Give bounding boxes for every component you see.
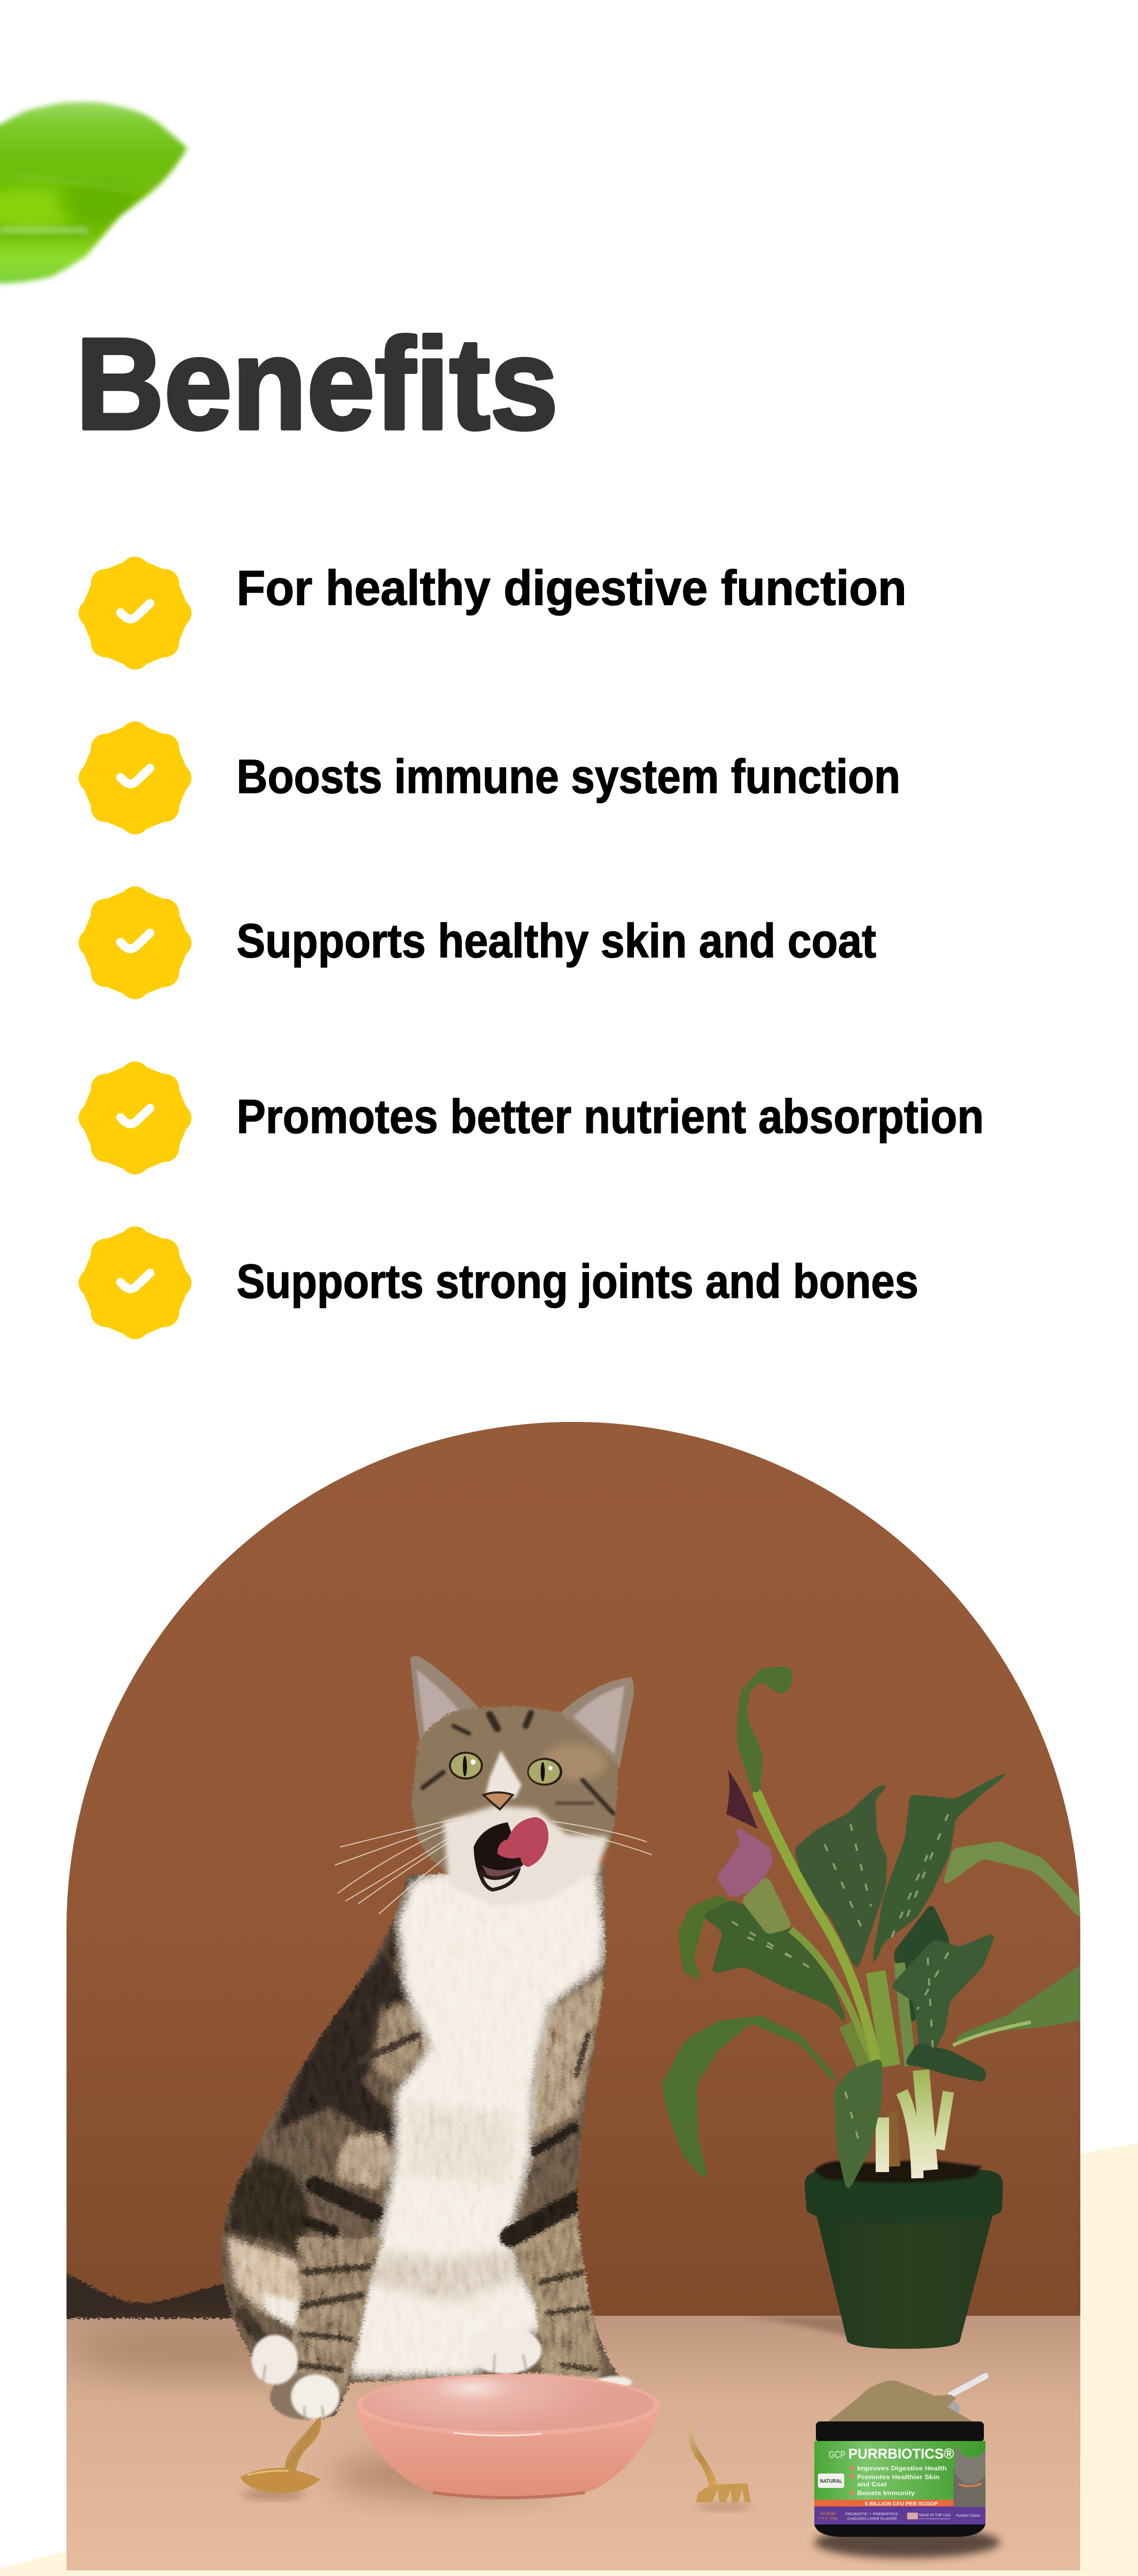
gold spoon [240, 2416, 321, 2494]
spoon bowl highlight [247, 2471, 289, 2475]
forehead markings [423, 1713, 613, 1814]
label purple band text: MADE IN THE USA [919, 2514, 950, 2517]
lower teeth and lip [480, 1870, 518, 1890]
curled top leaf [738, 1666, 793, 1794]
label purple band text [819, 2512, 980, 2521]
wall [66, 1422, 1080, 2317]
label natural badge [818, 2473, 844, 2488]
text: immune system: Boosts immune system function [237, 750, 900, 803]
cream background shape [0, 2143, 1138, 2576]
leaf: lower right light [953, 1960, 1087, 2048]
leaf speckles [732, 1814, 948, 2148]
whiskers [335, 1816, 652, 1914]
table [66, 2316, 1080, 2570]
label benefits: Promotes Healthier Skin [857, 2473, 940, 2481]
white blaze [484, 1751, 522, 1798]
left thigh light fur [227, 2237, 304, 2328]
cat head [335, 1656, 652, 1914]
leaf: arched right [942, 1841, 1082, 1922]
label CFU line: 5 BILLION CFU PER SCOOP [865, 2501, 938, 2507]
scoop body [948, 2396, 960, 2416]
potted plant [662, 1666, 1087, 2349]
fork tines [696, 2483, 751, 2502]
blurred green leaf [0, 98, 196, 289]
text: skin and coat: Supports healthy skin and coat [237, 914, 876, 968]
benefit item: skin and coat [78, 886, 876, 999]
right ear [558, 1677, 634, 1768]
stripes [242, 2035, 595, 2370]
nose [483, 1792, 513, 1809]
spoon handle [284, 2416, 321, 2472]
label natural badge: NATURAL [820, 2479, 842, 2484]
benefit item: nutrient absorption [78, 1061, 984, 1175]
right front leg [508, 2207, 603, 2383]
belly shading [361, 2251, 526, 2303]
title: Benefits [76, 312, 558, 456]
hind right paw [468, 2327, 542, 2374]
label purple band text: 4.23 oz. (120g) [819, 2517, 838, 2520]
flower dark petal [726, 1770, 758, 1829]
icon: yellow check badge [78, 721, 192, 835]
back dark leaf [894, 1903, 953, 2025]
bowl exterior [357, 2405, 660, 2498]
gold fork [687, 2421, 751, 2502]
shoulder tan patch [335, 2133, 394, 2190]
body base tabby [206, 1855, 644, 2427]
left front leg [275, 2237, 384, 2396]
stems [791, 1929, 948, 2178]
icon: yellow check badge [78, 886, 192, 999]
open mouth [474, 1822, 523, 1883]
back tan patches [371, 1999, 433, 2081]
cat body with fur [206, 1854, 644, 2427]
label brand: PURRBIOTICS: PURRBIOTICS® [848, 2446, 954, 2462]
hind left paw [252, 2335, 298, 2384]
leaf: left big [701, 1900, 850, 2031]
bowl shadow [330, 2454, 567, 2497]
label purple band text: CHICKEN LIVER FLAVOR [847, 2517, 897, 2521]
flower pink bloom [716, 1824, 773, 1899]
label purple band text: Purrfect Choice [956, 2514, 980, 2518]
leaf: right big [868, 1759, 1028, 1981]
scoop handle [951, 2376, 985, 2395]
right eye [527, 1758, 562, 1786]
fur grain [206, 1855, 644, 2427]
label benefits: and Coat [857, 2481, 887, 2488]
leaf: center large [794, 1780, 894, 1972]
neck dark side [376, 1870, 417, 1963]
table shadow of cat [72, 2326, 340, 2378]
bowl rim [357, 2374, 660, 2436]
chest white fur [350, 1854, 604, 2376]
label purple band text: of US and imported ingredients [919, 2517, 950, 2520]
hip dark mass [227, 2158, 309, 2257]
purple band [814, 2506, 985, 2524]
left eye [449, 1752, 483, 1780]
right toes [597, 2376, 632, 2388]
leaf: far left small [678, 1895, 731, 1982]
cat [206, 1656, 652, 2427]
warm cheek fur [543, 1743, 607, 1781]
pot rim [805, 2170, 1003, 2223]
benefit item: joints and bones [78, 1226, 918, 1340]
bowl interior [363, 2377, 654, 2431]
flower green base [741, 1875, 793, 1935]
grey fur around front paw [270, 2374, 338, 2419]
cat tail [57, 2269, 232, 2318]
orange band [814, 2500, 953, 2507]
pot body [816, 2215, 993, 2349]
icon: yellow check badge [78, 1061, 192, 1175]
right side tan fur [531, 1973, 608, 2138]
pink bowl [357, 2374, 660, 2498]
bowl base [433, 2493, 585, 2498]
leaf: horizontal dark [903, 2043, 986, 2082]
head shape [411, 1706, 618, 1891]
label purple band text: Net Weight: [820, 2512, 836, 2516]
green label [814, 2441, 985, 2500]
jar lid neck [816, 2421, 984, 2442]
powder heap [825, 2380, 977, 2424]
label purple band text: PROBIOTIC + PREBIOTICS [845, 2513, 898, 2516]
spoon bowl [240, 2468, 321, 2494]
benefit item: immune system [78, 721, 900, 835]
label benefits: Improves Digestive Health [857, 2465, 947, 2472]
leaf: bottom front [834, 2058, 882, 2193]
fork shadow [696, 2503, 752, 2511]
left inner ear [416, 1669, 459, 1735]
pot shadow [742, 2317, 856, 2339]
soil [814, 2160, 982, 2182]
cat paws [252, 2327, 632, 2419]
text: joints and bones: Supports strong joints and bones [237, 1255, 918, 1308]
icon: yellow check badge [78, 556, 192, 670]
rim highlight [454, 2433, 541, 2436]
icon: yellow check badge [78, 1226, 192, 1340]
spoon shadow [241, 2489, 305, 2500]
leaf: lower left drooping [662, 2016, 837, 2183]
mouth roof [482, 1865, 521, 1879]
label brand: GCP: GCP [829, 2450, 845, 2461]
text: nutrient absorption: Promotes better nutrient absorption [237, 1090, 984, 1143]
leaf: center right small [890, 1932, 996, 2075]
label benefits [850, 2465, 947, 2497]
label benefits: Boosts Immunity [857, 2489, 915, 2497]
toe lines [263, 2354, 527, 2419]
left ear [410, 1656, 479, 1748]
benefit item: digestive function [78, 556, 907, 670]
text: digestive function: For healthy digestive function [237, 561, 907, 616]
jar base [814, 2514, 985, 2537]
back dark mass [276, 1953, 412, 2146]
product jar [814, 2376, 1000, 2558]
right inner ear [573, 1686, 625, 1754]
tongue [497, 1817, 548, 1867]
label cat [953, 2445, 985, 2507]
arched photo panel [57, 1422, 1087, 2570]
fork handle [687, 2421, 717, 2486]
leaf: lower right stem [953, 2022, 1031, 2045]
front left paw [291, 2375, 340, 2419]
muzzle and chin white [443, 1806, 608, 1906]
main stalk [758, 1794, 876, 2061]
jar shadow [814, 2527, 1000, 2558]
